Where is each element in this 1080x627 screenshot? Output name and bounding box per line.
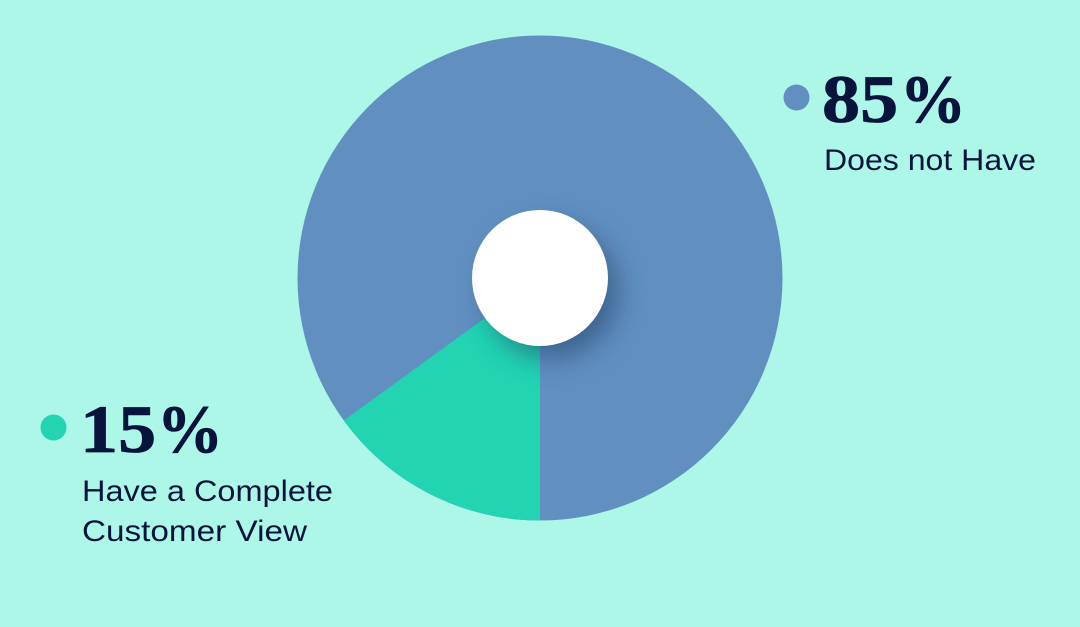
value: 85%: 85 [822, 62, 898, 137]
value: 15%: 15 [80, 392, 156, 467]
value: 85% [822, 62, 966, 137]
pie segment: 15% complete customer view [344, 278, 540, 520]
label: have a complete customer view [82, 475, 333, 548]
label: have a complete customer view: Have a Complete [82, 475, 333, 508]
value: 15% [80, 392, 223, 467]
center hole shadow [486, 226, 618, 358]
donut chart [298, 36, 782, 520]
center hole [472, 210, 608, 346]
label: does not have: Does not Have [824, 144, 1036, 177]
pie segment: 85% does not have [298, 36, 782, 520]
label: have a complete customer view: Customer View [82, 515, 307, 548]
legend dot: blue [784, 84, 810, 110]
value: 85%: % [900, 62, 966, 137]
legend: 15% [40, 392, 333, 548]
value: 15%: % [157, 392, 223, 467]
legend dot: green [40, 414, 66, 440]
legend: 85% [784, 62, 1036, 177]
